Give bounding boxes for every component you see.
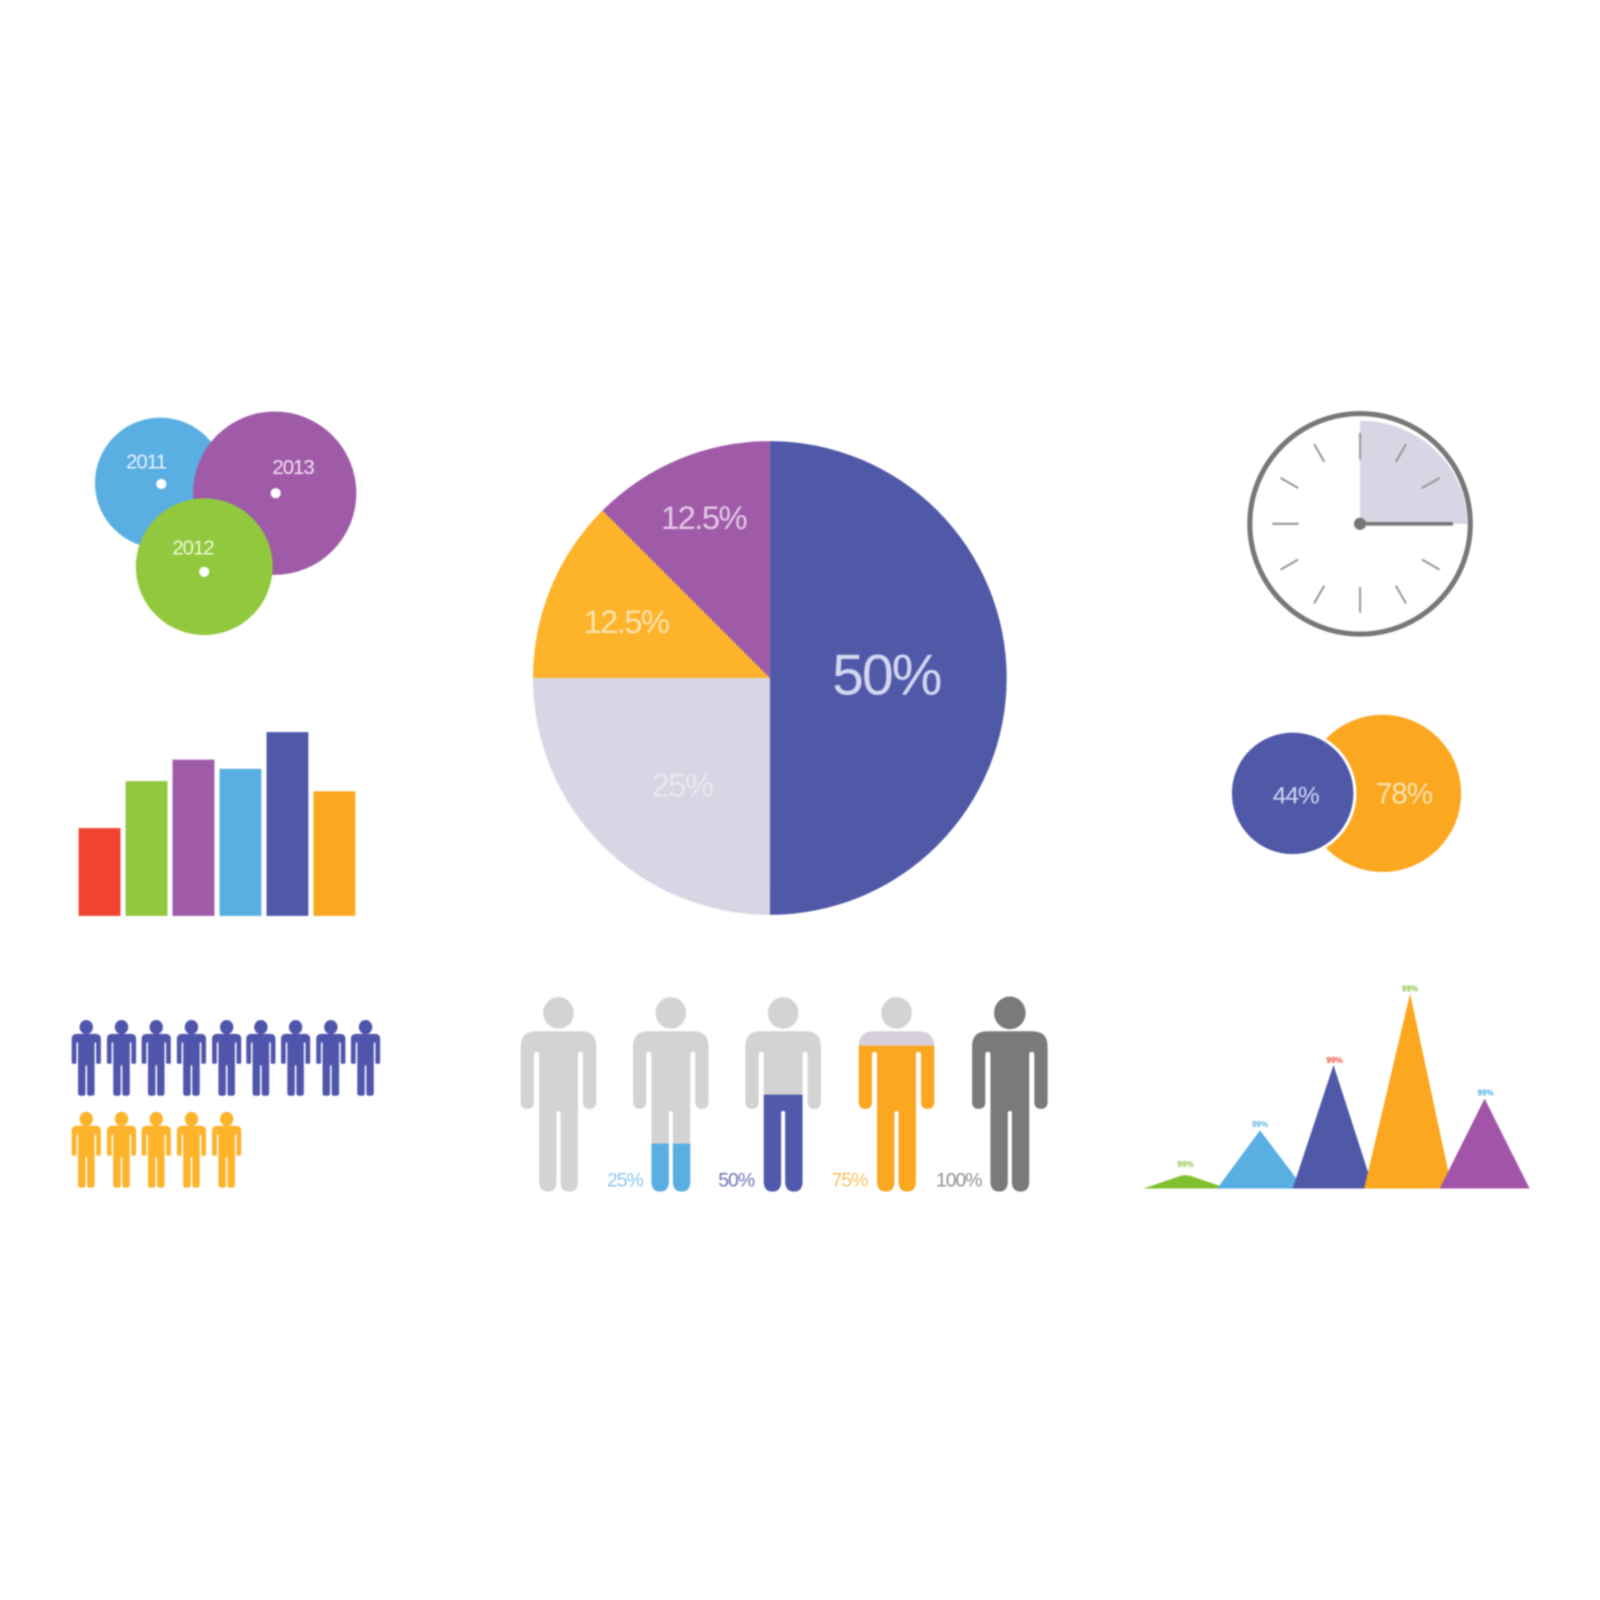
peak label green: 99% bbox=[1177, 1160, 1194, 1169]
peak label right blue: 99% bbox=[1477, 1089, 1495, 1098]
label 50%: 50% bbox=[718, 1169, 755, 1191]
person: base grey bbox=[521, 997, 596, 1192]
bubble 2012: 2012 bbox=[172, 537, 214, 559]
bubble 2013: 2013 bbox=[272, 457, 314, 479]
peak label red: 99% bbox=[1326, 1056, 1343, 1065]
label 50%: 50% bbox=[832, 643, 941, 707]
person: 50% bbox=[745, 997, 821, 1192]
peak label blue: 99% bbox=[1252, 1120, 1269, 1129]
bubble 2011: 2011 bbox=[126, 452, 167, 474]
label 12.5% purple: 12.5% bbox=[661, 499, 746, 536]
person: 25% bbox=[633, 997, 709, 1192]
bubble 2011 bbox=[95, 418, 226, 548]
venn comparison bbox=[1230, 715, 1461, 872]
pictogram: orange people row bbox=[72, 1112, 241, 1188]
label 12.5% orange: 12.5% bbox=[583, 603, 669, 640]
infographic canvas bbox=[70, 410, 1530, 1193]
person: 100% bbox=[972, 997, 1048, 1192]
peak chart bbox=[1144, 984, 1530, 1189]
label 25%: 25% bbox=[607, 1169, 644, 1191]
bar chart bbox=[79, 732, 355, 916]
panel: year bubbles bbox=[95, 411, 356, 635]
label 78%: 78% bbox=[1376, 778, 1433, 811]
bubble 2013 bbox=[193, 411, 356, 575]
label 100%: 100% bbox=[936, 1169, 982, 1191]
bubble 2012 bbox=[136, 498, 273, 635]
person: 75% bbox=[859, 997, 934, 1192]
label 44%: 44% bbox=[1273, 783, 1319, 810]
pie chart bbox=[533, 441, 1007, 915]
label 25%: 25% bbox=[652, 766, 713, 803]
clock icon bbox=[1250, 414, 1470, 634]
label 75%: 75% bbox=[832, 1169, 868, 1191]
pictogram: indigo people row bbox=[72, 1020, 380, 1096]
peak label top green: 99% bbox=[1402, 984, 1419, 993]
